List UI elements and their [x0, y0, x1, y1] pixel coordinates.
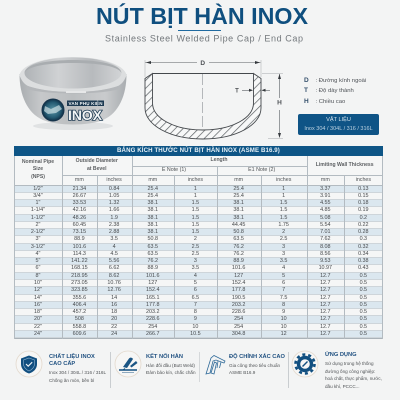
legend: T [304, 87, 354, 94]
table header: inches [106, 177, 122, 183]
table rows: 50.8 [233, 229, 244, 235]
table rows: 38.1 [147, 215, 158, 221]
legend: T: T [304, 87, 308, 94]
table rows: 33.53 [73, 200, 86, 206]
table header: Nominal Pipe [22, 159, 54, 165]
table rows: 0.5 [360, 316, 367, 322]
table rows: 254 [234, 316, 243, 322]
table rows: 152.4 [232, 280, 245, 286]
table rows: 12.7 [320, 287, 331, 293]
table rows: 101.6 [73, 244, 86, 250]
table rows: 190.5 [232, 295, 245, 301]
table rows: 73.15 [73, 229, 86, 235]
table rows: 16 [111, 302, 117, 308]
legend: D: : Đường kính ngoài [316, 78, 366, 84]
table header [14, 156, 383, 186]
table header: Outside Diameter [76, 158, 118, 164]
table rows: 203.2 [232, 302, 245, 308]
legend: D: D [304, 77, 309, 84]
table rows: 3.5 [280, 258, 287, 264]
table rows: 2.88 [109, 229, 119, 235]
table rows: 25.4 [147, 193, 158, 199]
table rows: 10 [281, 316, 287, 322]
table rows: 266.7 [146, 331, 159, 337]
table rows: 38.1 [233, 200, 244, 206]
table rows: 165.1 [146, 295, 159, 301]
legend: H: : Chiều cao [316, 99, 345, 105]
table rows: 1.5 [280, 215, 287, 221]
table rows: 1.32 [109, 200, 119, 206]
table title bar [14, 146, 383, 156]
table rows: 38.1 [147, 222, 158, 228]
table header: at Bevel [87, 166, 107, 172]
table rows: 3-1/2" [31, 244, 45, 250]
table rows: 26.67 [73, 193, 86, 199]
table rows: 12.76 [107, 287, 121, 293]
table rows: 1.9 [110, 215, 118, 221]
table rows: 1/2" [33, 186, 43, 192]
table rows: 3 [194, 258, 197, 264]
table rows: 8 [194, 309, 197, 315]
dimension table [14, 146, 383, 338]
feature: application: hoá chất, thực phẩm, nước, [325, 376, 382, 381]
table rows: 6 [282, 280, 285, 286]
table rows: 355.6 [73, 295, 86, 301]
table rows: 7 [282, 287, 285, 293]
table header: mm [234, 177, 243, 183]
table rows: 63.5 [147, 244, 158, 250]
feature: application: dầu khí, PCCC... [325, 384, 359, 388]
table rows: 9 [194, 316, 197, 322]
table rows: 4.55 [320, 200, 331, 206]
table rows: 20" [34, 316, 42, 322]
table rows: 0.5 [360, 295, 367, 301]
table rows: 10 [192, 324, 198, 330]
table rows: 8.08 [320, 244, 331, 250]
table rows: 38.1 [147, 207, 158, 213]
table rows: 1 [282, 186, 285, 192]
table rows: 38.1 [147, 229, 158, 235]
feature: welding: KẾT NỐI HÀN [146, 354, 183, 360]
table rows: 24 [111, 331, 117, 337]
table rows: 5" [36, 258, 40, 264]
table rows: 1.66 [109, 207, 119, 213]
table rows: 3.5 [192, 265, 199, 271]
table rows: 5.56 [109, 258, 119, 264]
feature: material: CHẤT LIỆU INOX [49, 354, 95, 360]
table rows: 1" [36, 200, 40, 206]
table rows: 203.2 [146, 309, 159, 315]
table rows: 101.6 [146, 273, 159, 279]
dimension H [262, 73, 283, 139]
table rows: 6.5 [192, 295, 199, 301]
legend: H [304, 98, 345, 105]
table rows: 8.62 [109, 273, 119, 279]
table rows: 25.4 [233, 193, 244, 199]
table header: inches [276, 177, 291, 183]
icon: caliper [205, 355, 226, 374]
table rows: 4" [36, 251, 40, 257]
logo [42, 99, 104, 123]
table rows: 0.43 [358, 265, 369, 271]
table header: E Note (1) [162, 167, 186, 173]
table rows: 10.76 [107, 280, 121, 286]
table rows: 101.6 [232, 265, 245, 271]
table rows: 12.7 [320, 273, 331, 279]
table header: E1 Note (2) [248, 167, 275, 173]
table rows: 1.5 [192, 229, 199, 235]
table rows: 3.5 [110, 236, 118, 242]
table rows: 5.08 [320, 215, 331, 221]
table rows: 2" [36, 222, 40, 228]
table header: (NPS) [31, 174, 45, 180]
material box [298, 114, 379, 135]
table rows: 6 [194, 287, 197, 293]
table header: mm [148, 177, 157, 183]
table rows: 177.8 [146, 302, 159, 308]
table rows: 114.3 [73, 251, 86, 257]
table rows: 38.1 [233, 215, 244, 221]
table rows: 4.5 [110, 251, 118, 257]
table rows: 76.2 [233, 251, 244, 257]
table rows: 0.2 [360, 215, 367, 221]
logo: VAN PHỤ KIỆN [68, 99, 102, 106]
table rows: 7 [194, 302, 197, 308]
table rows: 4 [282, 265, 285, 271]
table rows: 4 [113, 244, 116, 250]
table rows: 254 [148, 324, 157, 330]
table rows: 12.7 [320, 309, 331, 315]
feature: application [292, 350, 382, 389]
table rows: 1 [194, 186, 197, 192]
feature: material [16, 350, 106, 383]
table rows: 168.15 [71, 265, 88, 271]
table rows: 5 [194, 280, 197, 286]
table rows: 0.19 [358, 207, 369, 213]
table rows: 20 [111, 316, 117, 322]
table rows: 1.75 [278, 222, 289, 228]
feature: welding: Đảm bảo kín, chắc chắn [146, 370, 196, 375]
table rows: 9.53 [320, 258, 331, 264]
table rows: 127 [234, 273, 243, 279]
feature: precision: Gia công theo tiêu chuẩn [229, 362, 280, 368]
table rows: 3.91 [320, 193, 331, 199]
table rows: 14 [111, 295, 117, 301]
table rows: 7.5 [280, 295, 287, 301]
dimension T: T [235, 88, 239, 94]
table rows: 406.4 [73, 302, 86, 308]
material box: VẬT LIỆU [326, 117, 351, 123]
table rows: 5.54 [320, 222, 331, 228]
table rows: 0.28 [358, 229, 369, 235]
table rows: 12.7 [320, 324, 331, 330]
table rows: 38.1 [233, 207, 244, 213]
table rows: 1.5 [280, 207, 287, 213]
table rows: 3" [36, 236, 40, 242]
table header: Limiting Wall Thickness [316, 162, 374, 168]
table rows: 25.4 [233, 186, 244, 192]
table rows: 63.5 [233, 236, 244, 242]
subtitle: Stainless Steel Welded Pipe Cap / End Cap [105, 34, 303, 44]
table rows: 6.62 [109, 265, 119, 271]
table rows: 2.5 [192, 244, 199, 250]
table rows: 0.38 [358, 258, 369, 264]
feature: material: CAO CẤP [49, 361, 75, 367]
icon: welding torch [114, 350, 142, 378]
title: NÚT BỊT HÀN INOX [96, 2, 308, 29]
table rows: 1 [282, 193, 285, 199]
table rows: 8.56 [320, 251, 331, 257]
table rows: 3 [282, 251, 285, 257]
table rows: 22 [111, 324, 117, 330]
table rows: 254 [234, 324, 243, 330]
table rows: 0.5 [360, 331, 367, 337]
table rows: 0.13 [358, 186, 369, 192]
table rows: 4 [194, 273, 197, 279]
table header: Length [210, 157, 227, 163]
table title bar: BẢNG KÍCH THƯỚC NÚT BỊT HÀN INOX (ASME B16.9) [117, 146, 280, 154]
table rows: 2.5 [192, 251, 199, 257]
legend: D [304, 77, 366, 84]
table rows: 1 [194, 193, 197, 199]
table rows: 228.6 [146, 316, 159, 322]
table rows: 0.34 [358, 251, 369, 257]
table rows: 2.5 [280, 236, 287, 242]
table rows: 2 [282, 229, 285, 235]
table rows: 304.8 [232, 331, 245, 337]
table rows: 9 [282, 309, 285, 315]
table rows: 12 [281, 331, 287, 337]
table rows: 48.26 [73, 215, 86, 221]
table rows: 127 [148, 280, 157, 286]
logo: INOX [68, 107, 103, 123]
table rows: 76.2 [233, 244, 244, 250]
table header: mm [75, 177, 84, 183]
table rows: 8 [282, 302, 285, 308]
table rows: 12" [34, 287, 42, 293]
table rows: 0.5 [360, 280, 367, 286]
table rows: 273.05 [71, 280, 88, 286]
table rows: 3.37 [320, 186, 331, 192]
feature: welding [114, 350, 196, 378]
table rows: 10" [34, 280, 42, 286]
icon: shield [16, 350, 42, 378]
table rows: 2 [194, 236, 197, 242]
table rows: 0.3 [360, 236, 367, 242]
table rows: 457.2 [73, 309, 86, 315]
table rows: 1.5 [192, 222, 199, 228]
table rows: 177.8 [232, 287, 245, 293]
feature: material: Chống ăn mòn, bền bỉ [49, 378, 94, 382]
table rows: 0.84 [109, 186, 119, 192]
table rows: 18" [34, 309, 42, 315]
table rows: 0.32 [358, 244, 369, 250]
table rows: 1-1/2" [31, 215, 45, 221]
dimension H: H [277, 100, 282, 106]
feature: precision: ASME B16.9 [229, 370, 255, 375]
technical drawing: cap cross-section [144, 60, 270, 140]
table rows: 60.45 [73, 222, 86, 228]
table rows: 2-1/2" [31, 229, 45, 235]
table rows: 12.7 [320, 331, 331, 337]
table rows: 10 [281, 324, 287, 330]
table rows: 152.4 [146, 287, 159, 293]
table rows: 0.15 [358, 193, 369, 199]
product photo: stainless steel cap with logo [20, 57, 126, 130]
table header: Size [33, 166, 43, 172]
table rows: 323.85 [71, 287, 88, 293]
table rows: 7.01 [320, 229, 331, 235]
table rows: 0.5 [360, 302, 367, 308]
feature: material: Inox 304 / 304L / 316 / 316L [49, 370, 106, 375]
table rows: 24" [34, 331, 42, 337]
legend: T: : Độ dày thành [316, 88, 354, 94]
table rows: 228.6 [232, 309, 245, 315]
table rows: 0.18 [358, 200, 369, 206]
feature: welding: Hàn đối đầu (Butt Weld) [146, 362, 195, 368]
table rows: 3 [282, 244, 285, 250]
table rows: 18 [111, 309, 117, 315]
feature: application: ỨNG DỤNG [325, 352, 357, 358]
icon: gear [292, 350, 318, 378]
feature: application: đường ống công nghiệp: [325, 368, 375, 374]
table rows: 76.2 [147, 258, 158, 264]
table rows: 6" [36, 265, 40, 271]
table rows: 88.9 [147, 265, 158, 271]
table rows: 88.9 [74, 236, 85, 242]
table rows: 8" [36, 273, 40, 279]
table rows: 12.7 [320, 295, 331, 301]
table header: inches [356, 177, 371, 183]
feature: precision: ĐỘ CHÍNH XÁC CAO [229, 354, 285, 360]
table rows: 1.5 [192, 215, 199, 221]
table rows: 88.9 [233, 258, 244, 264]
table rows: 2.38 [109, 222, 119, 228]
table rows: 5 [282, 273, 285, 279]
table rows: 1-1/4" [31, 207, 45, 213]
table header: mm [321, 177, 330, 183]
material box: Inox 304 / 304L / 316 / 316L [304, 126, 373, 132]
table rows: 12.7 [320, 280, 331, 286]
table rows: 21.34 [73, 186, 86, 192]
table rows: 141.22 [71, 258, 88, 264]
table rows: 42.16 [73, 207, 86, 213]
table rows: 0.5 [360, 309, 367, 315]
table rows: 0.5 [360, 324, 367, 330]
table rows: 1.05 [109, 193, 119, 199]
table rows: 12.7 [320, 302, 331, 308]
feature: precision [205, 353, 285, 375]
table rows: 10.97 [319, 265, 332, 271]
table rows: 508 [75, 316, 84, 322]
table rows: 25.4 [147, 186, 158, 192]
feature: application: Sử dụng trong hệ thống [325, 361, 374, 366]
table rows: 14" [34, 295, 42, 301]
table rows: 3/4" [33, 193, 43, 199]
table rows: 0.5 [360, 287, 367, 293]
table rows: 558.8 [73, 324, 86, 330]
table rows: 16" [34, 302, 42, 308]
table rows: 44.45 [232, 222, 245, 228]
table rows: 12.7 [320, 316, 331, 322]
table rows: 0.5 [360, 273, 367, 279]
table rows: 22" [34, 324, 42, 330]
table rows: 218.95 [71, 273, 88, 279]
table rows: 1.5 [192, 207, 199, 213]
table rows: 7.62 [320, 236, 331, 242]
table rows: 1.5 [192, 200, 199, 206]
table rows: 609.6 [73, 331, 86, 337]
table rows: 4.85 [320, 207, 331, 213]
table rows: 50.8 [147, 236, 158, 242]
dimension D: D [200, 60, 205, 67]
table rows: 10.5 [190, 331, 201, 337]
table rows: 63.5 [147, 251, 158, 257]
table rows [15, 186, 382, 338]
table rows: 1.5 [280, 200, 287, 206]
table rows: 38.1 [147, 200, 158, 206]
table header: inches [188, 177, 203, 183]
legend: H: H [304, 98, 309, 105]
table rows: 0.22 [358, 222, 369, 228]
